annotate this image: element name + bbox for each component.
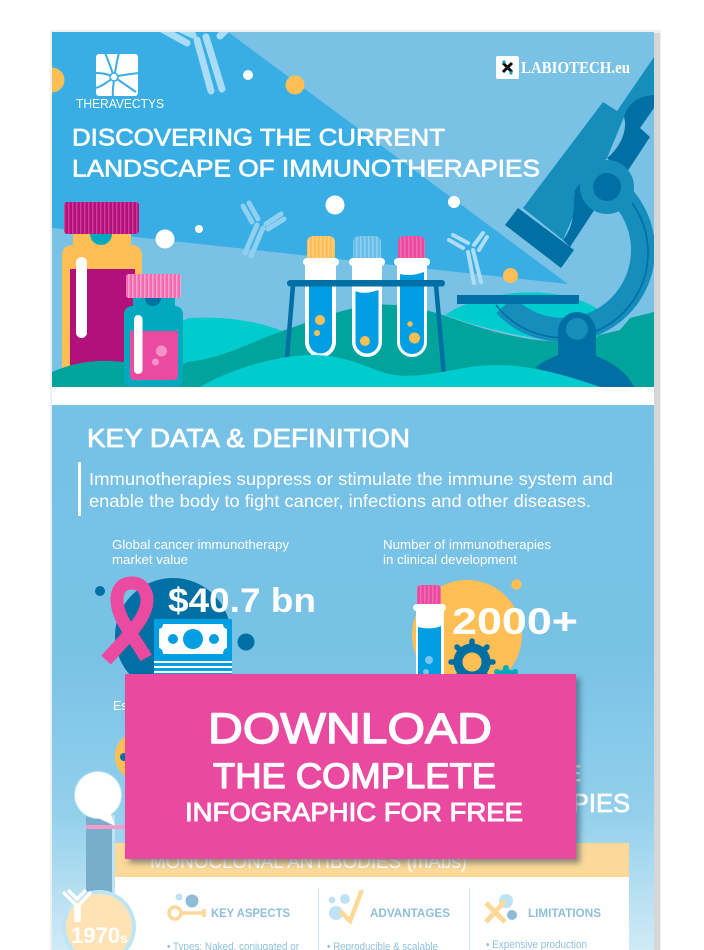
timeline thermometer (86, 815, 131, 900)
logo: Labiotech: LABIOTECH.eu (521, 58, 630, 77)
icon: test tube pink cap (394, 236, 430, 357)
column: limitations: LIMITATIONS (528, 908, 601, 920)
label: market value (112, 538, 290, 567)
label: market value: Global cancer immunotherapy (112, 538, 290, 552)
column: key aspects: KEY ASPECTS (211, 908, 290, 920)
label: clinical development (383, 538, 551, 567)
stat: immunotherapies count: 2000+ (452, 601, 578, 642)
icon: middle antibody (243, 203, 284, 256)
white band (52, 387, 654, 404)
front left and front centre hills (52, 355, 600, 387)
logo: Labiotech (496, 56, 630, 79)
column: limitations (486, 894, 601, 950)
callout: download button: INFOGRAPHIC FOR FREE (185, 797, 523, 827)
callout: download button: DOWNLOAD (208, 705, 492, 753)
icon: microscope (457, 57, 654, 387)
panel: monoclonal antibodies (112, 843, 629, 950)
icon: small bottle (124, 274, 183, 387)
hills (183, 292, 654, 387)
label: market value: market value (112, 553, 188, 567)
column dividers (318, 888, 470, 950)
icon: large bottle (62, 202, 142, 387)
logo: Theravectys: THERAVECTYS (76, 96, 164, 111)
heading: key data: KEY DATA & DEFINITION (87, 425, 410, 453)
label: clinical development: Number of immunotherapies (383, 538, 551, 552)
label: clinical development: in clinical development (383, 553, 518, 567)
heading: types of immunotherapies: E (566, 761, 581, 786)
timeline badge: 1970s: 1970s (71, 923, 128, 948)
heading: types of immunotherapies: IMMUNOTHERAPIES (379, 790, 630, 818)
column: key aspects (167, 894, 299, 950)
icon: ribbon and banknotes (95, 578, 254, 694)
panel: hero illustration (40, 28, 654, 387)
panel heading: MONOCLONAL ANTIBODIES (mAbs) (150, 852, 467, 873)
definition text block: Immunotherapies suppress or stimulate the immune system and (89, 469, 613, 489)
icon: test tube blue cap (349, 236, 385, 357)
icon: partially hidden orange circle (115, 731, 165, 781)
icon: top antibody (160, 28, 228, 91)
logo: Theravectys (76, 53, 164, 111)
icon: rack bar and leg (287, 280, 445, 376)
icon: rack far side (287, 285, 293, 358)
speech bubble (74, 771, 122, 826)
column: advantages (327, 890, 450, 950)
icon: right antibody (449, 233, 487, 283)
callout: download button (125, 674, 576, 859)
decorative dots (40, 68, 518, 283)
title (74, 128, 540, 177)
title: DISCOVERING THE CURRENT (72, 124, 445, 152)
heading: types of immunotherapies (379, 761, 630, 818)
timeline badge: 1970s (62, 890, 136, 950)
column: advantages: ADVANTAGES (370, 908, 450, 920)
definition text block (78, 462, 613, 516)
icon: test tube and gears (412, 579, 522, 695)
icon: test tube yellow cap (303, 236, 339, 357)
title: LANDSCAPE OF IMMUNOTHERAPIES (72, 156, 540, 182)
stat: market value: $40.7 bn (168, 582, 316, 620)
hidden label fragment: Estimated (113, 699, 169, 713)
definition text block: enable the body to fight cancer, infections and other diseases. (89, 491, 591, 511)
panel: key data and definition (52, 405, 654, 950)
callout: download button: THE COMPLETE (213, 757, 496, 796)
